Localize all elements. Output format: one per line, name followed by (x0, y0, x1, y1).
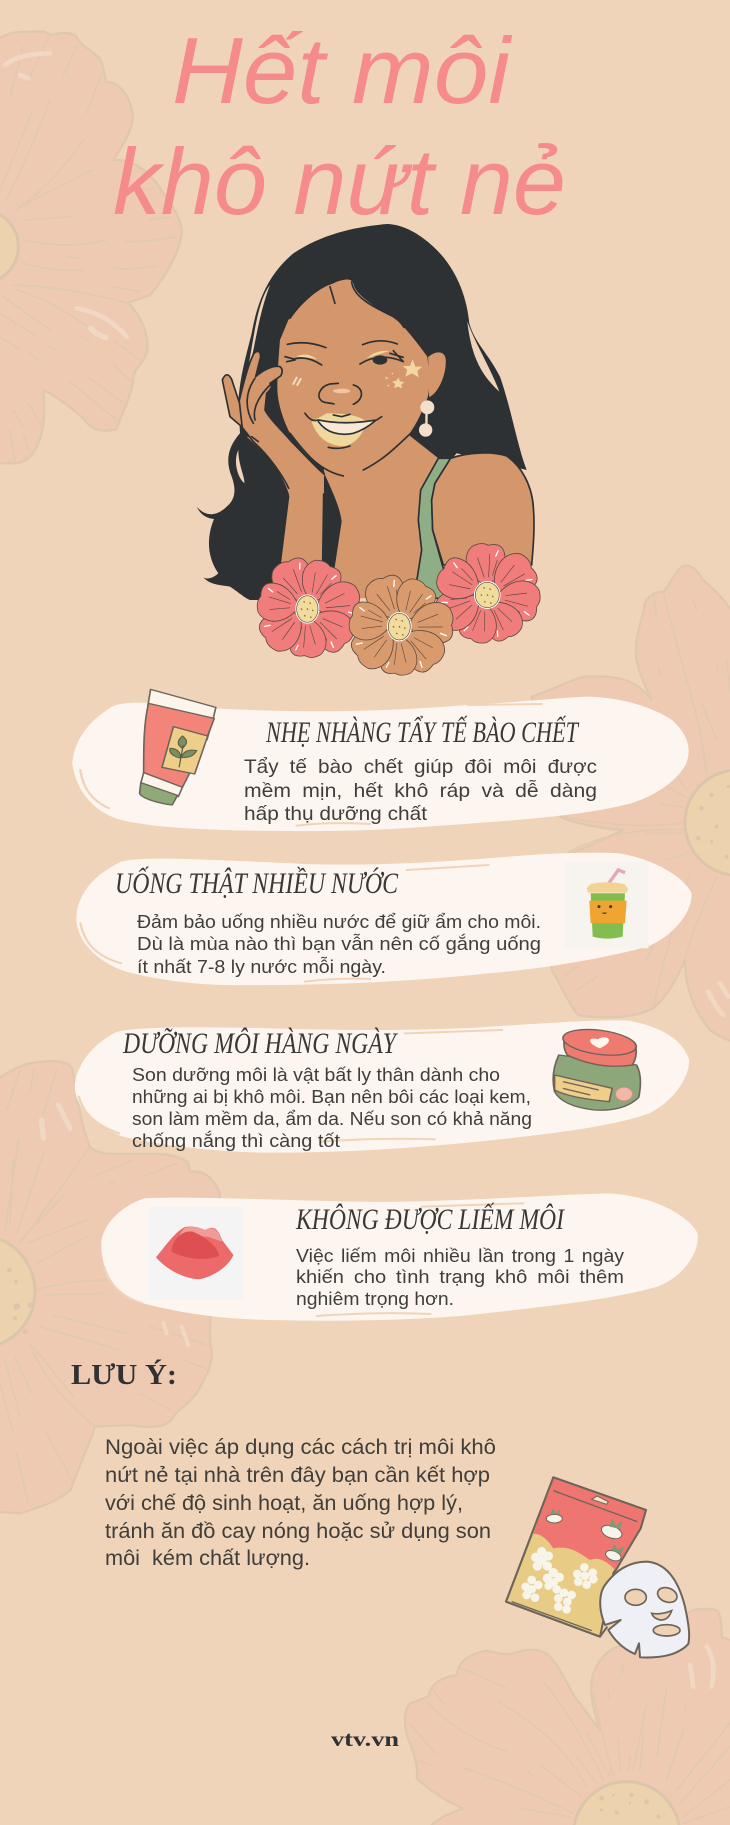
body text: son làm mềm da, ẩm da. Nếu son có khả năng (132, 1108, 532, 1129)
heading: note: LƯU Ý: (71, 1358, 177, 1391)
earring (419, 400, 434, 437)
note text: nứt nẻ tại nhà trên đây bạn cần kết hợp (105, 1464, 490, 1487)
illustration: smiling girl with flowers (197, 224, 543, 678)
hair (197, 224, 527, 600)
body text: ít nhất 7-8 ly nước mỗi ngày. (137, 956, 386, 977)
body text: Dù là mùa nào thì bạn vẫn nên cố gắng uống (137, 933, 541, 954)
title: Hết môi (172, 18, 512, 123)
star makeup (385, 359, 423, 389)
body text: những ai bị khô môi. Bạn nên bôi các loại kem, (132, 1086, 531, 1107)
note text (105, 1436, 496, 1570)
body text: Son dưỡng môi là vật bất ly thân dành cho (132, 1064, 500, 1085)
panel: exfoliate (72, 689, 689, 831)
note text: môi kém chất lượng. (105, 1547, 310, 1570)
body text (244, 756, 597, 825)
body text: chống nắng thì càng tốt (132, 1130, 340, 1151)
icon: cup (565, 862, 648, 948)
hair highlight slits (236, 285, 499, 483)
body text: nghiêm trọng hơn. (296, 1288, 454, 1309)
panel: do not lick lips (101, 1193, 698, 1321)
body text: khiến cho tình trạng khô môi thêm (296, 1266, 624, 1287)
icon: scrub tube (140, 689, 216, 805)
ear (427, 352, 447, 398)
forearm (247, 437, 324, 593)
eyes and eyebrows (287, 341, 397, 348)
body text (137, 911, 541, 977)
green tank top (414, 458, 453, 598)
title: khô nứt nẻ (113, 129, 566, 234)
background flower: bottom right (405, 1609, 730, 1825)
background flower: bottom left (0, 1061, 220, 1513)
title (113, 18, 566, 234)
panel: daily lip care (75, 1020, 689, 1153)
heading: KHÔNG ĐƯỢC LIẾM MÔI (295, 1202, 566, 1236)
icon: cream jar (553, 1025, 640, 1110)
body text: mềm mịn, hết khô ráp và dễ dàng (244, 779, 597, 802)
body text (296, 1245, 625, 1309)
heading: DƯỠNG MÔI HÀNG NGÀY (122, 1027, 399, 1060)
note text: với chế độ sinh hoạt, ăn uống hợp lý, (105, 1492, 463, 1515)
face (277, 279, 429, 475)
background flower: top left (0, 31, 182, 464)
flower: left pink (254, 553, 364, 658)
source: vtv.vn: vtv.vn (331, 1727, 399, 1751)
body text: Tẩy tế bào chết giúp đôi môi được (244, 756, 597, 778)
icon: lips (148, 1207, 243, 1300)
hand (222, 351, 324, 493)
right shoulder (432, 453, 534, 565)
flower: right pink (431, 543, 543, 647)
body text: Việc liếm môi nhiều lần trong 1 ngày (296, 1245, 625, 1266)
neck and chest (323, 433, 438, 598)
dark wedge by neck (323, 475, 342, 563)
note text: Ngoài việc áp dụng các cách trị môi khô (105, 1436, 496, 1459)
heading: UỐNG THẬT NHIỀU NƯỚC (115, 866, 399, 900)
panel: drink water (76, 853, 692, 985)
note text: tránh ăn đồ cay nóng hoặc sử dụng son (105, 1520, 491, 1543)
background flower: right (532, 566, 730, 1042)
heading: NHẸ NHÀNG TẨY TẾ BÀO CHẾT (265, 715, 580, 749)
body text (132, 1064, 532, 1151)
body text: hấp thụ dưỡng chất (244, 803, 428, 825)
smile and lips (312, 413, 367, 446)
body text: Đảm bảo uống nhiều nước để giữ ẩm cho môi. (137, 911, 541, 932)
nose (319, 383, 361, 404)
flower: centre brown (346, 571, 455, 678)
icon: face mask pack (506, 1477, 689, 1657)
